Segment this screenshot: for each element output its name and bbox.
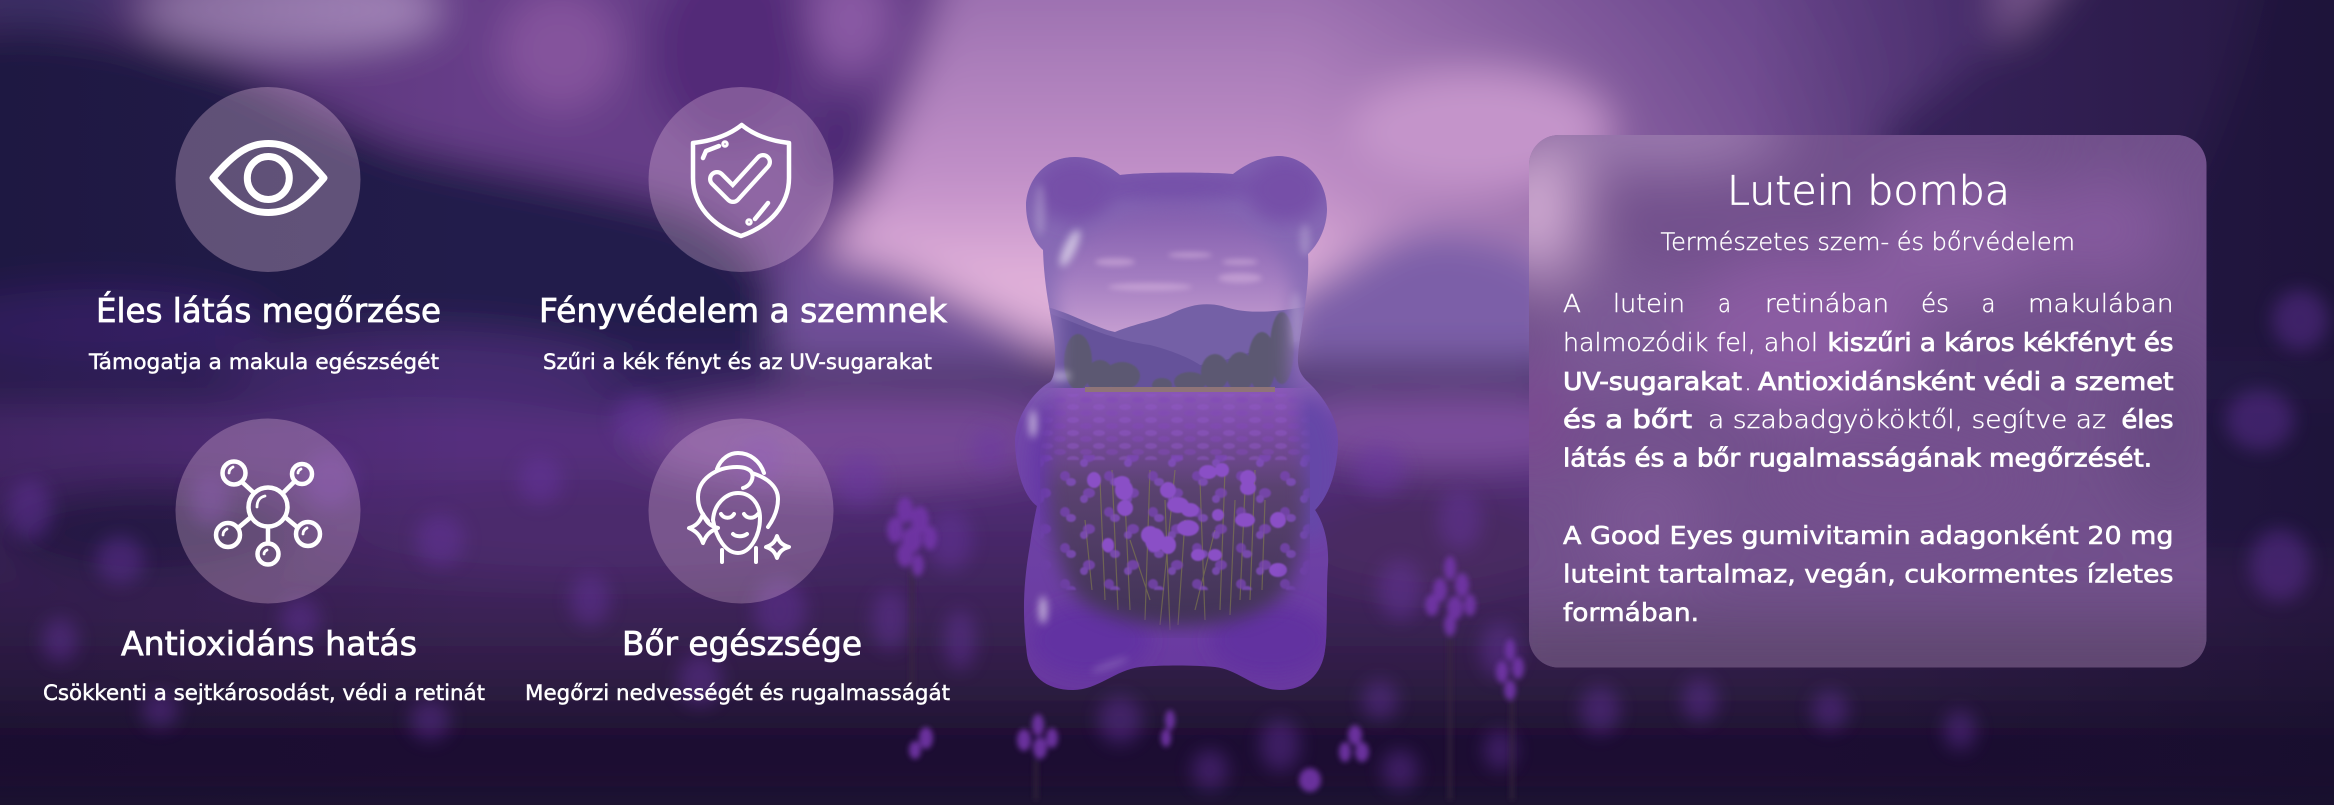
icon: shield with check — [693, 125, 789, 236]
icon: eye — [213, 144, 324, 212]
paragraph: lutein benefits: UV-sugarakat — [1563, 367, 1742, 396]
paragraph: lutein benefits — [1563, 289, 2174, 472]
heading: light protection: Fényvédelem a szemnek — [539, 292, 947, 330]
paragraph: lutein benefits: makulában — [2028, 289, 2174, 318]
paragraph: lutein benefits: . — [1744, 367, 1752, 396]
highlights — [1029, 184, 1310, 675]
icon circle: skin health — [648, 418, 834, 604]
paragraph: lutein benefits: A — [1563, 289, 1581, 318]
panel: Lutein bomba description — [1529, 135, 2206, 668]
paragraph: lutein benefits: és — [1921, 289, 1949, 318]
icon circle: sharp vision — [176, 87, 360, 272]
caption: light protection: Szűri a kék fényt és az UV-sugarakat — [543, 350, 932, 374]
paragraph: lutein benefits: a — [1982, 289, 1996, 318]
icon: molecule — [216, 462, 320, 564]
paragraph: Good Eyes product: luteint tartalmaz, vegán, cukormentes ízletes — [1563, 560, 2174, 588]
panel subtitle: Természetes szem- és bőrvédelem — [1660, 228, 2075, 256]
soft bokeh flowers — [8, 290, 2328, 790]
caption: sharp vision: Támogatja a makula egészségét — [88, 350, 439, 374]
paragraph: lutein benefits: retinában — [1765, 289, 1889, 318]
panel heading: Lutein bomba — [1727, 168, 2010, 214]
paragraph: lutein benefits: éles — [2122, 405, 2174, 434]
heading: skin health: Bőr egészsége — [622, 625, 862, 663]
gummy bear with landscape inside — [1015, 156, 1338, 690]
icon: face with towel — [689, 453, 789, 562]
paragraph: Good Eyes product: formában. — [1563, 598, 1699, 627]
jelly shading — [1030, 158, 1338, 676]
paragraph: lutein benefits: látás és a bőr rugalmasságának megőrzését. — [1563, 444, 2152, 472]
paragraph: lutein benefits: a — [1718, 289, 1731, 318]
miniature landscape — [1040, 190, 1310, 638]
paragraph: lutein benefits: halmozódik fel, ahol — [1563, 328, 1818, 357]
paragraph: Good Eyes product: A Good Eyes gumivitamin adagonként 20 mg — [1563, 521, 2174, 550]
in-focus lavender sprigs — [887, 497, 1524, 800]
caption: skin health: Megőrzi nedvességét és rugalmasságát — [525, 681, 950, 705]
paragraph: lutein benefits: Antioxidánsként védi a szemet — [1758, 367, 2174, 396]
paragraph: lutein benefits: lutein — [1613, 289, 1685, 318]
heading: sharp vision: Éles látás megőrzése — [96, 292, 441, 330]
paragraph: lutein benefits: a szabadgyököktől, segítve az — [1708, 405, 2106, 434]
heading: antioxidant: Antioxidáns hatás — [121, 625, 417, 663]
paragraph: lutein benefits: és a bőrt — [1563, 405, 1692, 434]
paragraph: Good Eyes product — [1563, 521, 2174, 627]
icon circle: light protection — [648, 87, 834, 272]
caption: antioxidant: Csökkenti a sejtkárosodást, védi a retinát — [43, 681, 485, 705]
icon circle: antioxidant — [176, 418, 360, 604]
paragraph: lutein benefits: kiszűri a káros kékfényt és — [1828, 328, 2174, 357]
